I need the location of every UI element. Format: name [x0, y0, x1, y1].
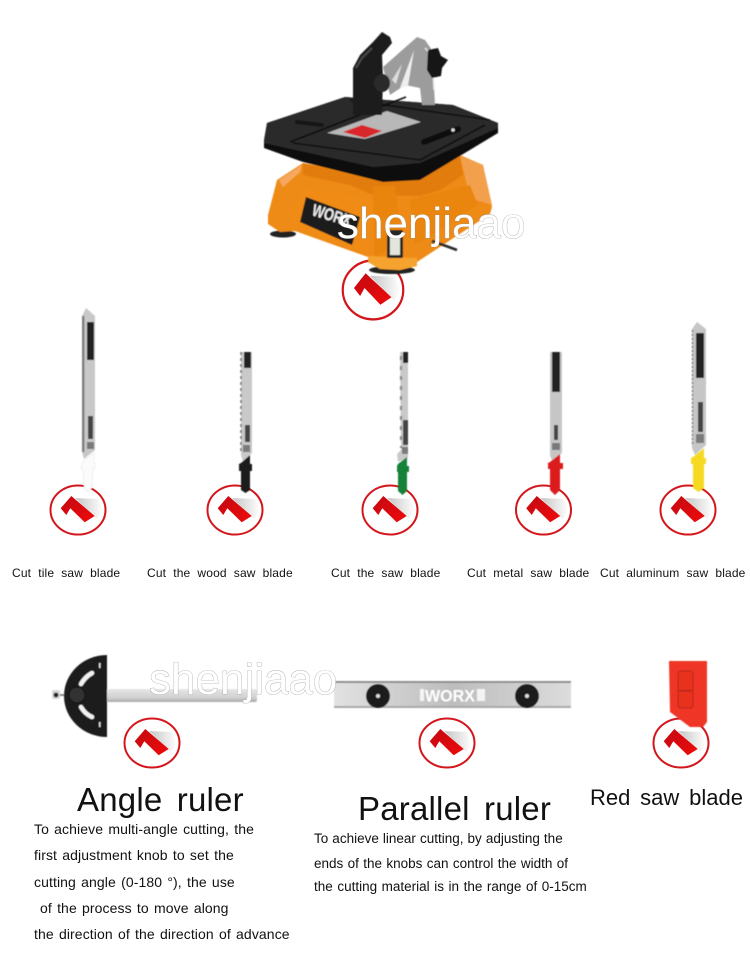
badge: aluminum — [660, 486, 716, 534]
blade captions: Cut the saw blade — [331, 566, 441, 580]
badge: angle ruler — [124, 718, 180, 768]
text: angle ruler description: To achieve multi-angle cutting, the — [34, 821, 254, 837]
WORX plate — [300, 197, 360, 245]
heading: red saw blade: Red saw blade — [590, 785, 743, 810]
text: parallel ruler description: the cutting material is in the range of 0-15cm — [314, 879, 587, 894]
blade: tile — [50, 308, 106, 534]
angle ruler — [52, 655, 257, 768]
row: saw blades — [50, 308, 716, 534]
badge: red guard — [654, 718, 708, 768]
table slots — [290, 97, 490, 160]
text: parallel ruler description: ends of the knobs can control the width of — [314, 856, 568, 871]
saw feet — [270, 230, 415, 274]
parallel ruler: WORX — [425, 686, 476, 706]
blade: aluminum — [660, 322, 716, 534]
text: parallel ruler description — [314, 831, 587, 894]
power switch — [387, 230, 403, 258]
text: angle ruler description: the direction of the direction of advance — [34, 926, 290, 942]
badge: wood — [208, 486, 262, 534]
badge: general — [362, 486, 418, 534]
heading: angle ruler: Angle ruler — [77, 781, 244, 818]
text: angle ruler description: of the process to move along — [40, 900, 229, 916]
blade captions: Cut the wood saw blade — [147, 566, 293, 580]
table saw product — [264, 32, 498, 274]
text: parallel ruler description: To achieve linear cutting, by adjusting the — [314, 831, 563, 846]
badge: parallel ruler — [420, 718, 474, 768]
power cord — [432, 241, 457, 250]
saw plate — [327, 111, 421, 139]
icon: badge under table saw — [343, 261, 403, 319]
blade captions: Cut tile saw blade — [12, 566, 120, 580]
text: angle ruler description: first adjustment knob to set the — [34, 847, 234, 863]
parallel ruler — [334, 681, 571, 768]
blade captions: Cut metal saw blade — [467, 566, 590, 580]
angle bracket — [383, 37, 435, 105]
black guard handle — [353, 32, 392, 115]
blade: wood — [208, 352, 262, 534]
text: angle ruler description: cutting angle (0-180 °), the use — [34, 874, 235, 890]
red saw blade guard — [654, 661, 708, 768]
blade captions — [12, 566, 746, 580]
WORX plate: WORX — [310, 201, 354, 231]
blade captions: Cut aluminum saw blade — [600, 566, 746, 580]
watermark: top: shenjiaao — [337, 199, 525, 248]
badge: metal — [516, 486, 571, 534]
watermark: lower: shenjiaao — [149, 655, 337, 704]
badge: tile — [50, 486, 106, 534]
heading: parallel ruler: Parallel ruler — [358, 790, 551, 827]
black table top — [264, 97, 498, 182]
blade: general — [362, 352, 418, 534]
blade: metal — [516, 352, 571, 534]
text: angle ruler description — [34, 821, 290, 942]
orange saw body — [268, 155, 492, 270]
